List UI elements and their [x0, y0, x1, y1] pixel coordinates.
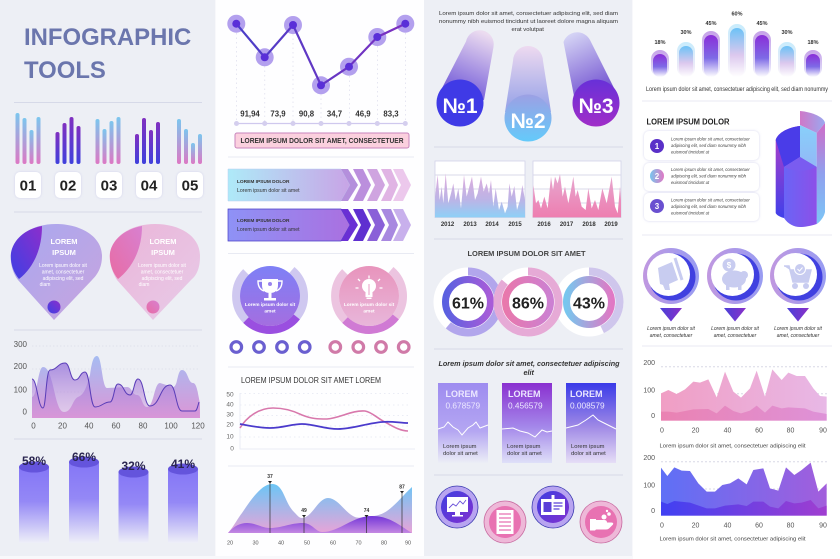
intro text: erat volutpat: [512, 27, 544, 33]
donut: 86 percent: [494, 268, 562, 336]
mountain chart: [227, 474, 412, 546]
list item 2: Lorem ipsum dolor sit amet, consectetuer: [671, 167, 750, 172]
panel: column one: [11, 24, 205, 543]
teardrop: right: amet, consectetuer: [141, 270, 184, 276]
card: second: 0.456579: [508, 400, 543, 410]
area chart: purple: 80: [787, 522, 794, 530]
area chart: 80: [139, 422, 148, 430]
icon: light bulb: [356, 276, 382, 299]
area chart: purple: 60: [755, 522, 763, 530]
pin: piggy bank: amet, consectetuer: [714, 333, 757, 339]
card: third: Lorem ipsum: [571, 444, 605, 450]
panel: column three: [434, 11, 624, 543]
mountain chart: 90: [405, 540, 411, 546]
mountain chart: 70: [355, 540, 362, 546]
donut heading: LOREM IPSUM DOLOR SIT AMET: [468, 249, 586, 258]
mountain chart: 49: [301, 508, 307, 514]
area chart: 0: [31, 422, 36, 430]
capsule bars: 60%: [731, 12, 743, 18]
mountain chart: 87: [399, 484, 405, 490]
list item 3: 3: [655, 202, 660, 211]
area chart: purple: 0: [660, 522, 664, 530]
area chart: pink: 200: [643, 360, 655, 367]
area chart: purple: 20: [692, 522, 699, 530]
donut: 43 percent: 43%: [573, 296, 605, 312]
area chart: [14, 340, 205, 430]
icon: document badge: [484, 501, 526, 543]
line chart: 91,94: [240, 110, 260, 118]
circle badge: trophy: [236, 266, 304, 330]
arrow banner: light: Lorem ipsum dolor sit amet: [237, 188, 300, 194]
teardrop: left: [11, 224, 102, 320]
cylinder bars: 58%: [22, 454, 46, 468]
card: third: dolor sit amet: [571, 451, 606, 457]
cylinder bars: 41%: [171, 457, 195, 471]
card: first: 0.678579: [446, 400, 480, 410]
pink banner: LOREM IPSUM DOLOR SIT AMET, CONSECTETUER: [240, 136, 404, 145]
histogram: 2016 to 2019: 2018: [582, 222, 596, 228]
capsule: number 1: №1: [442, 95, 478, 118]
capsule bars: 45%: [705, 21, 717, 27]
area chart: pink: Lorem ipsum dolor sit amet, consectetuer adipiscing elit: [660, 444, 806, 450]
area chart: 120: [191, 422, 205, 430]
pin: shopping cart: [770, 248, 826, 339]
curve chart: [226, 392, 415, 452]
icon: hand badge: [580, 501, 622, 543]
number tiles: 03: [101, 178, 117, 194]
teardrop: right: IPSUM: [151, 248, 175, 257]
line chart: 83,3: [383, 110, 399, 118]
curve chart: 10: [226, 434, 234, 440]
list item 2: euismod tincidunt ut: [671, 180, 710, 185]
intro text: nonummy nibh euismod tincidunt ut laoreet dolore magna aliquam: [439, 19, 618, 25]
capsule bars: [651, 12, 822, 77]
area chart: pink: 60: [755, 428, 763, 434]
capsule: number 3: №3: [578, 95, 614, 118]
card: first: dolor sit amet: [443, 451, 478, 457]
teardrop: left: adipiscing elit, sed: [43, 276, 84, 282]
card: first: Lorem ipsum: [443, 444, 477, 450]
teardrop: left: Lorem ipsum dolor sit: [39, 263, 87, 269]
area chart: 60: [112, 422, 121, 430]
card: third: 0.008579: [570, 400, 605, 410]
area chart: 200: [14, 362, 28, 371]
mountain chart: 50: [304, 540, 310, 546]
icon: trophy: [258, 279, 282, 300]
title: TOOLS: [24, 57, 106, 84]
bar group 02: [56, 117, 80, 164]
histogram: 2012 to 2015: 2012: [441, 222, 455, 228]
bar group 04: [135, 118, 160, 164]
line chart title: LOREM IPSUM DOLOR SIT AMET LOREM: [241, 375, 381, 385]
donut: 61 percent: 61%: [452, 296, 484, 312]
teardrop: right: Lorem ipsum dolor sit: [138, 263, 186, 269]
histogram: 2016 to 2019: 2019: [604, 222, 618, 228]
pin: piggy bank: [707, 248, 763, 339]
teardrop: right: diam: [139, 282, 149, 288]
cylinder bars: [19, 450, 198, 543]
cylinder bars: 66%: [72, 450, 96, 464]
circle badge: idea: [335, 266, 403, 330]
ring row: pink: [330, 342, 409, 352]
bar group 03: [96, 117, 120, 164]
circle badge: idea: Lorem ipsum dolor sit: [344, 303, 394, 308]
capsule bars: 18%: [654, 40, 666, 46]
circle badge: trophy: amet: [264, 308, 276, 314]
panel: column four: [643, 12, 828, 542]
area chart: pink: 20: [692, 428, 699, 434]
capsule: number 2: [504, 46, 552, 142]
mountain chart: 40: [278, 540, 284, 546]
line chart: 34,7: [327, 110, 342, 118]
arrow banner: purple: [228, 209, 411, 241]
histogram: 2012 to 2015: [435, 161, 525, 228]
teardrop: left: diam: [40, 282, 50, 288]
card: first: [438, 383, 488, 463]
card: third: [566, 383, 616, 463]
capsule: number 3: [564, 32, 620, 127]
area chart: purple: 90: [819, 522, 827, 530]
number tiles: 02: [60, 178, 76, 194]
teardrop: right: adipiscing elit, sed: [142, 276, 183, 282]
line chart: 90,8: [299, 110, 315, 118]
curve chart: 0: [230, 446, 234, 452]
list item 2: 2: [655, 172, 660, 181]
intro text: Lorem ipsum dolor sit amet, consectetuer adipiscing elit, sed diam: [439, 11, 618, 17]
card: second: Lorem ipsum: [507, 444, 541, 450]
ring row: purple: [231, 342, 310, 352]
list item 1: [644, 131, 759, 160]
area chart: 20: [58, 422, 67, 430]
number tiles: [15, 172, 203, 198]
capsule bars: 18%: [807, 40, 819, 46]
teardrop: right: [110, 224, 200, 320]
capsule bars: 45%: [756, 21, 768, 27]
teardrop: right: LOREM: [149, 237, 177, 246]
area chart: pink: 100: [643, 388, 655, 394]
mountain chart: 37: [267, 474, 273, 480]
number tiles: 04: [141, 178, 158, 194]
card: second: [502, 383, 552, 463]
histogram: 2012 to 2015: 2014: [485, 222, 499, 228]
arrow banner: purple: Lorem ipsum dolor sit amet: [237, 227, 300, 233]
list item 2: [644, 163, 759, 191]
histogram: 2012 to 2015: 2015: [508, 222, 522, 228]
area chart: 40: [85, 422, 94, 430]
curve chart: 40: [226, 402, 234, 408]
number tiles: 01: [20, 178, 36, 194]
list item 3: [644, 193, 759, 221]
card: first: LOREM: [446, 389, 478, 399]
circle badge: trophy: Lorem ipsum dolor sit: [245, 303, 295, 308]
circle badge: idea: amet: [363, 308, 375, 314]
arrow banner: light: LOREM IPSUM DOLOR: [237, 179, 290, 185]
pin: megaphone: amet, consectetuer: [650, 333, 693, 339]
mountain chart: 20: [227, 540, 233, 546]
capsule bars: 30%: [781, 30, 793, 36]
bar group 05: [177, 119, 202, 164]
area chart: pink: 80: [787, 428, 794, 434]
list item 1: euismod tincidunt ut: [671, 150, 710, 154]
3D cylinder: [776, 111, 825, 227]
list item 1: 1: [655, 142, 660, 151]
area chart: purple: 200: [643, 455, 655, 462]
teardrop: left: LOREM: [50, 237, 78, 246]
pin: piggy bank: Lorem ipsum dolor sit: [711, 326, 759, 332]
arrow banner: purple: LOREM IPSUM DOLOR: [237, 218, 290, 224]
area chart: pink: 0: [651, 413, 655, 420]
capsule: number 1: [436, 30, 494, 127]
area chart: purple: 100: [643, 482, 655, 490]
list item 1: Lorem ipsum dolor sit amet, consectetuer: [671, 136, 750, 142]
area chart: pink: [643, 360, 827, 450]
pin: shopping cart: amet, consectetuer: [777, 333, 820, 339]
curve chart: 30: [226, 412, 234, 418]
mountain chart: 60: [330, 540, 336, 546]
icon: monitor badge: [436, 486, 478, 528]
area chart: pink: 40: [724, 428, 731, 434]
mountain chart: 80: [381, 540, 387, 546]
donut: 61 percent: [434, 268, 502, 336]
pin: megaphone: [643, 248, 699, 339]
donut: 43 percent: [554, 268, 624, 336]
pink banner: [235, 133, 409, 148]
card section heading: elit: [524, 368, 534, 377]
capsule: number 2: №2: [510, 110, 546, 133]
card section heading: Lorem ipsum dolor sit amet, consectetuer adipiscing: [438, 359, 620, 368]
curve chart: 50: [226, 392, 234, 398]
number tiles: 05: [182, 178, 198, 194]
area chart: 0: [23, 408, 28, 416]
line chart: 46,9: [355, 110, 371, 118]
area chart: purple: 0: [651, 508, 655, 515]
list item 1: adipiscing elit, sed diam nonummy nibh: [671, 143, 747, 148]
line chart: 73,9: [270, 110, 286, 118]
mountain chart: 30: [252, 540, 259, 546]
donut: 86 percent: 86%: [512, 296, 544, 312]
histogram: 2016 to 2019: [533, 161, 621, 228]
area chart: 300: [14, 340, 28, 349]
list item 3: adipiscing elit, sed diam nonummy nibh: [671, 204, 747, 209]
teardrop: left: IPSUM: [52, 248, 76, 257]
card: second: LOREM: [508, 389, 540, 399]
teardrop: left: amet, consectetuer: [42, 270, 85, 276]
card: third: LOREM: [570, 389, 602, 399]
area chart: purple: 40: [724, 522, 731, 530]
list item 3: Lorem ipsum dolor sit amet, consectetuer: [671, 198, 750, 202]
histogram: 2012 to 2015: 2013: [463, 222, 477, 228]
cylinder bars: 32%: [121, 459, 146, 473]
histogram: 2016 to 2019: 2017: [560, 222, 574, 228]
card: second: dolor sit amet: [507, 451, 542, 457]
list heading: LOREM IPSUM DOLOR: [646, 118, 730, 126]
area chart: 100: [164, 422, 178, 430]
area chart: pink: 90: [819, 428, 827, 434]
list item 2: adipiscing elit, sed diam nonummy nibh: [671, 174, 747, 178]
list item 3: euismod tincidunt ut: [671, 210, 710, 216]
area chart: pink: 0: [660, 428, 664, 434]
title: INFOGRAPHIC: [24, 24, 191, 51]
mountain chart: 74: [364, 508, 369, 514]
pin: piggy bank: $: [727, 261, 732, 270]
histogram: 2016 to 2019: 2016: [537, 222, 551, 228]
area chart: purple: Lorem ipsum dolor sit amet, consectetuer adipiscing elit: [660, 536, 806, 542]
pin: megaphone: Lorem ipsum dolor sit: [647, 326, 695, 332]
icon: id card badge: [532, 486, 574, 528]
capsule bars: 30%: [680, 30, 692, 36]
curve chart: 20: [226, 422, 234, 428]
arrow banner: light: [228, 169, 411, 201]
panel: column two: [226, 15, 415, 546]
pin: shopping cart: Lorem ipsum dolor sit: [774, 326, 822, 332]
line chart: [227, 15, 414, 126]
area chart: purple: [643, 455, 827, 542]
bar group 01: [16, 113, 40, 164]
area chart: 100: [14, 386, 28, 394]
